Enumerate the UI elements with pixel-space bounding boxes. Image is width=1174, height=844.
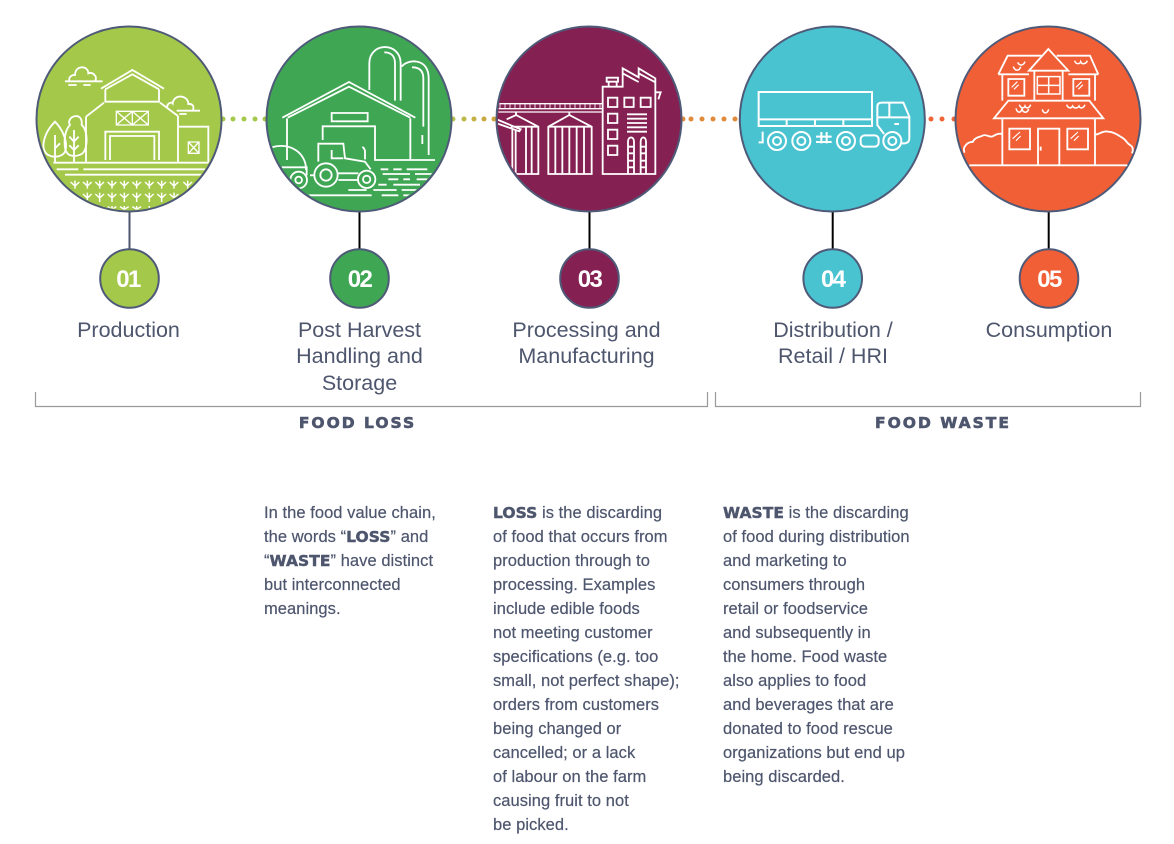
- text block: loss definition: orders from customers: [493, 696, 659, 714]
- text block: waste definition: and subsequently in: [723, 624, 871, 642]
- stage badge 05: [1020, 249, 1078, 308]
- icon: silos and factory: [495, 26, 682, 212]
- icon: delivery truck: [740, 26, 925, 212]
- text block: waste definition: organizations but end up: [723, 744, 905, 762]
- dotted connectors between stage circles: [220, 116, 956, 122]
- text block: waste definition: and marketing to: [723, 552, 847, 570]
- label: Production: Production: [77, 318, 180, 342]
- stage badge 04: 04: [821, 266, 847, 293]
- text block: loss definition: cancelled; or a lack: [493, 744, 636, 762]
- stage badge 02: 02: [348, 266, 372, 293]
- stage badge 05: 05: [1037, 266, 1062, 293]
- bracket: food waste: [716, 392, 1140, 406]
- text block: intro: “WASTE” have distinct: [264, 552, 433, 570]
- text block: intro: the words “LOSS” and: [264, 528, 428, 546]
- text block: loss definition: of food that occurs from: [493, 528, 668, 546]
- heading: food loss: FOOD LOSS: [299, 414, 416, 432]
- text block: waste definition: being discarded.: [723, 768, 845, 786]
- stage badge 02: [330, 249, 389, 308]
- label: Consumption: Consumption: [986, 318, 1112, 342]
- text block: loss definition: include edible foods: [493, 600, 640, 618]
- label: Processing and Manufacturing: Manufacturing: [518, 344, 655, 368]
- text block: intro: In the food value chain,: [264, 504, 436, 522]
- icon: house: [956, 26, 1140, 212]
- label: Processing and Manufacturing: Processing and: [512, 318, 661, 342]
- text block: waste definition: donated to food rescue: [723, 720, 893, 738]
- text block: waste definition: retail or foodservice: [723, 600, 868, 618]
- label: Post Harvest Handling and Storage: Storage: [322, 371, 397, 395]
- text block: loss definition: be picked.: [493, 816, 569, 834]
- text block: waste definition: of food during distribution: [723, 528, 910, 546]
- label: Distribution / Retail / HRI: Retail / HRI: [778, 344, 888, 368]
- stage badge 03: 03: [578, 266, 602, 293]
- icon: farm barn and crops: [36, 26, 222, 212]
- text block: intro: meanings.: [264, 600, 341, 618]
- stage badge 04: [803, 249, 862, 308]
- bracket: food loss: [36, 392, 708, 406]
- stage badge 03: [560, 249, 619, 308]
- label: Post Harvest Handling and Storage: Handling and: [296, 344, 423, 368]
- text block: loss definition: processing. Examples: [493, 576, 655, 594]
- stage badge 01: 01: [116, 266, 141, 293]
- text block: waste definition: WASTE is the discarding: [723, 504, 909, 522]
- text block: waste definition: and beverages that are: [723, 696, 894, 714]
- text block: loss definition: being changed or: [493, 720, 622, 738]
- label: Distribution / Retail / HRI: Distribution /: [773, 318, 893, 342]
- text block: waste definition: also applies to food: [723, 672, 866, 690]
- text block: loss definition: of labour on the farm: [493, 768, 646, 786]
- stem lines linking circles to number badges: [130, 212, 1049, 250]
- label: Post Harvest Handling and Storage: Post Harvest: [298, 318, 421, 342]
- text block: waste definition: the home. Food waste: [723, 648, 887, 666]
- icon: storage barn, silos and tractor: [266, 26, 452, 212]
- text block: loss definition: not meeting customer: [493, 624, 653, 642]
- text block: loss definition: small, not perfect shape);: [493, 672, 680, 690]
- stage badge 01: [100, 249, 159, 308]
- heading: food waste: FOOD WASTE: [875, 414, 1011, 432]
- text block: loss definition: specifications (e.g. too: [493, 648, 658, 666]
- text block: loss definition: causing fruit to not: [493, 792, 629, 810]
- text block: waste definition: consumers through: [723, 576, 865, 594]
- text block: intro: but interconnected: [264, 576, 401, 594]
- text block: loss definition: production through to: [493, 552, 650, 570]
- text block: loss definition: LOSS is the discarding: [493, 504, 662, 522]
